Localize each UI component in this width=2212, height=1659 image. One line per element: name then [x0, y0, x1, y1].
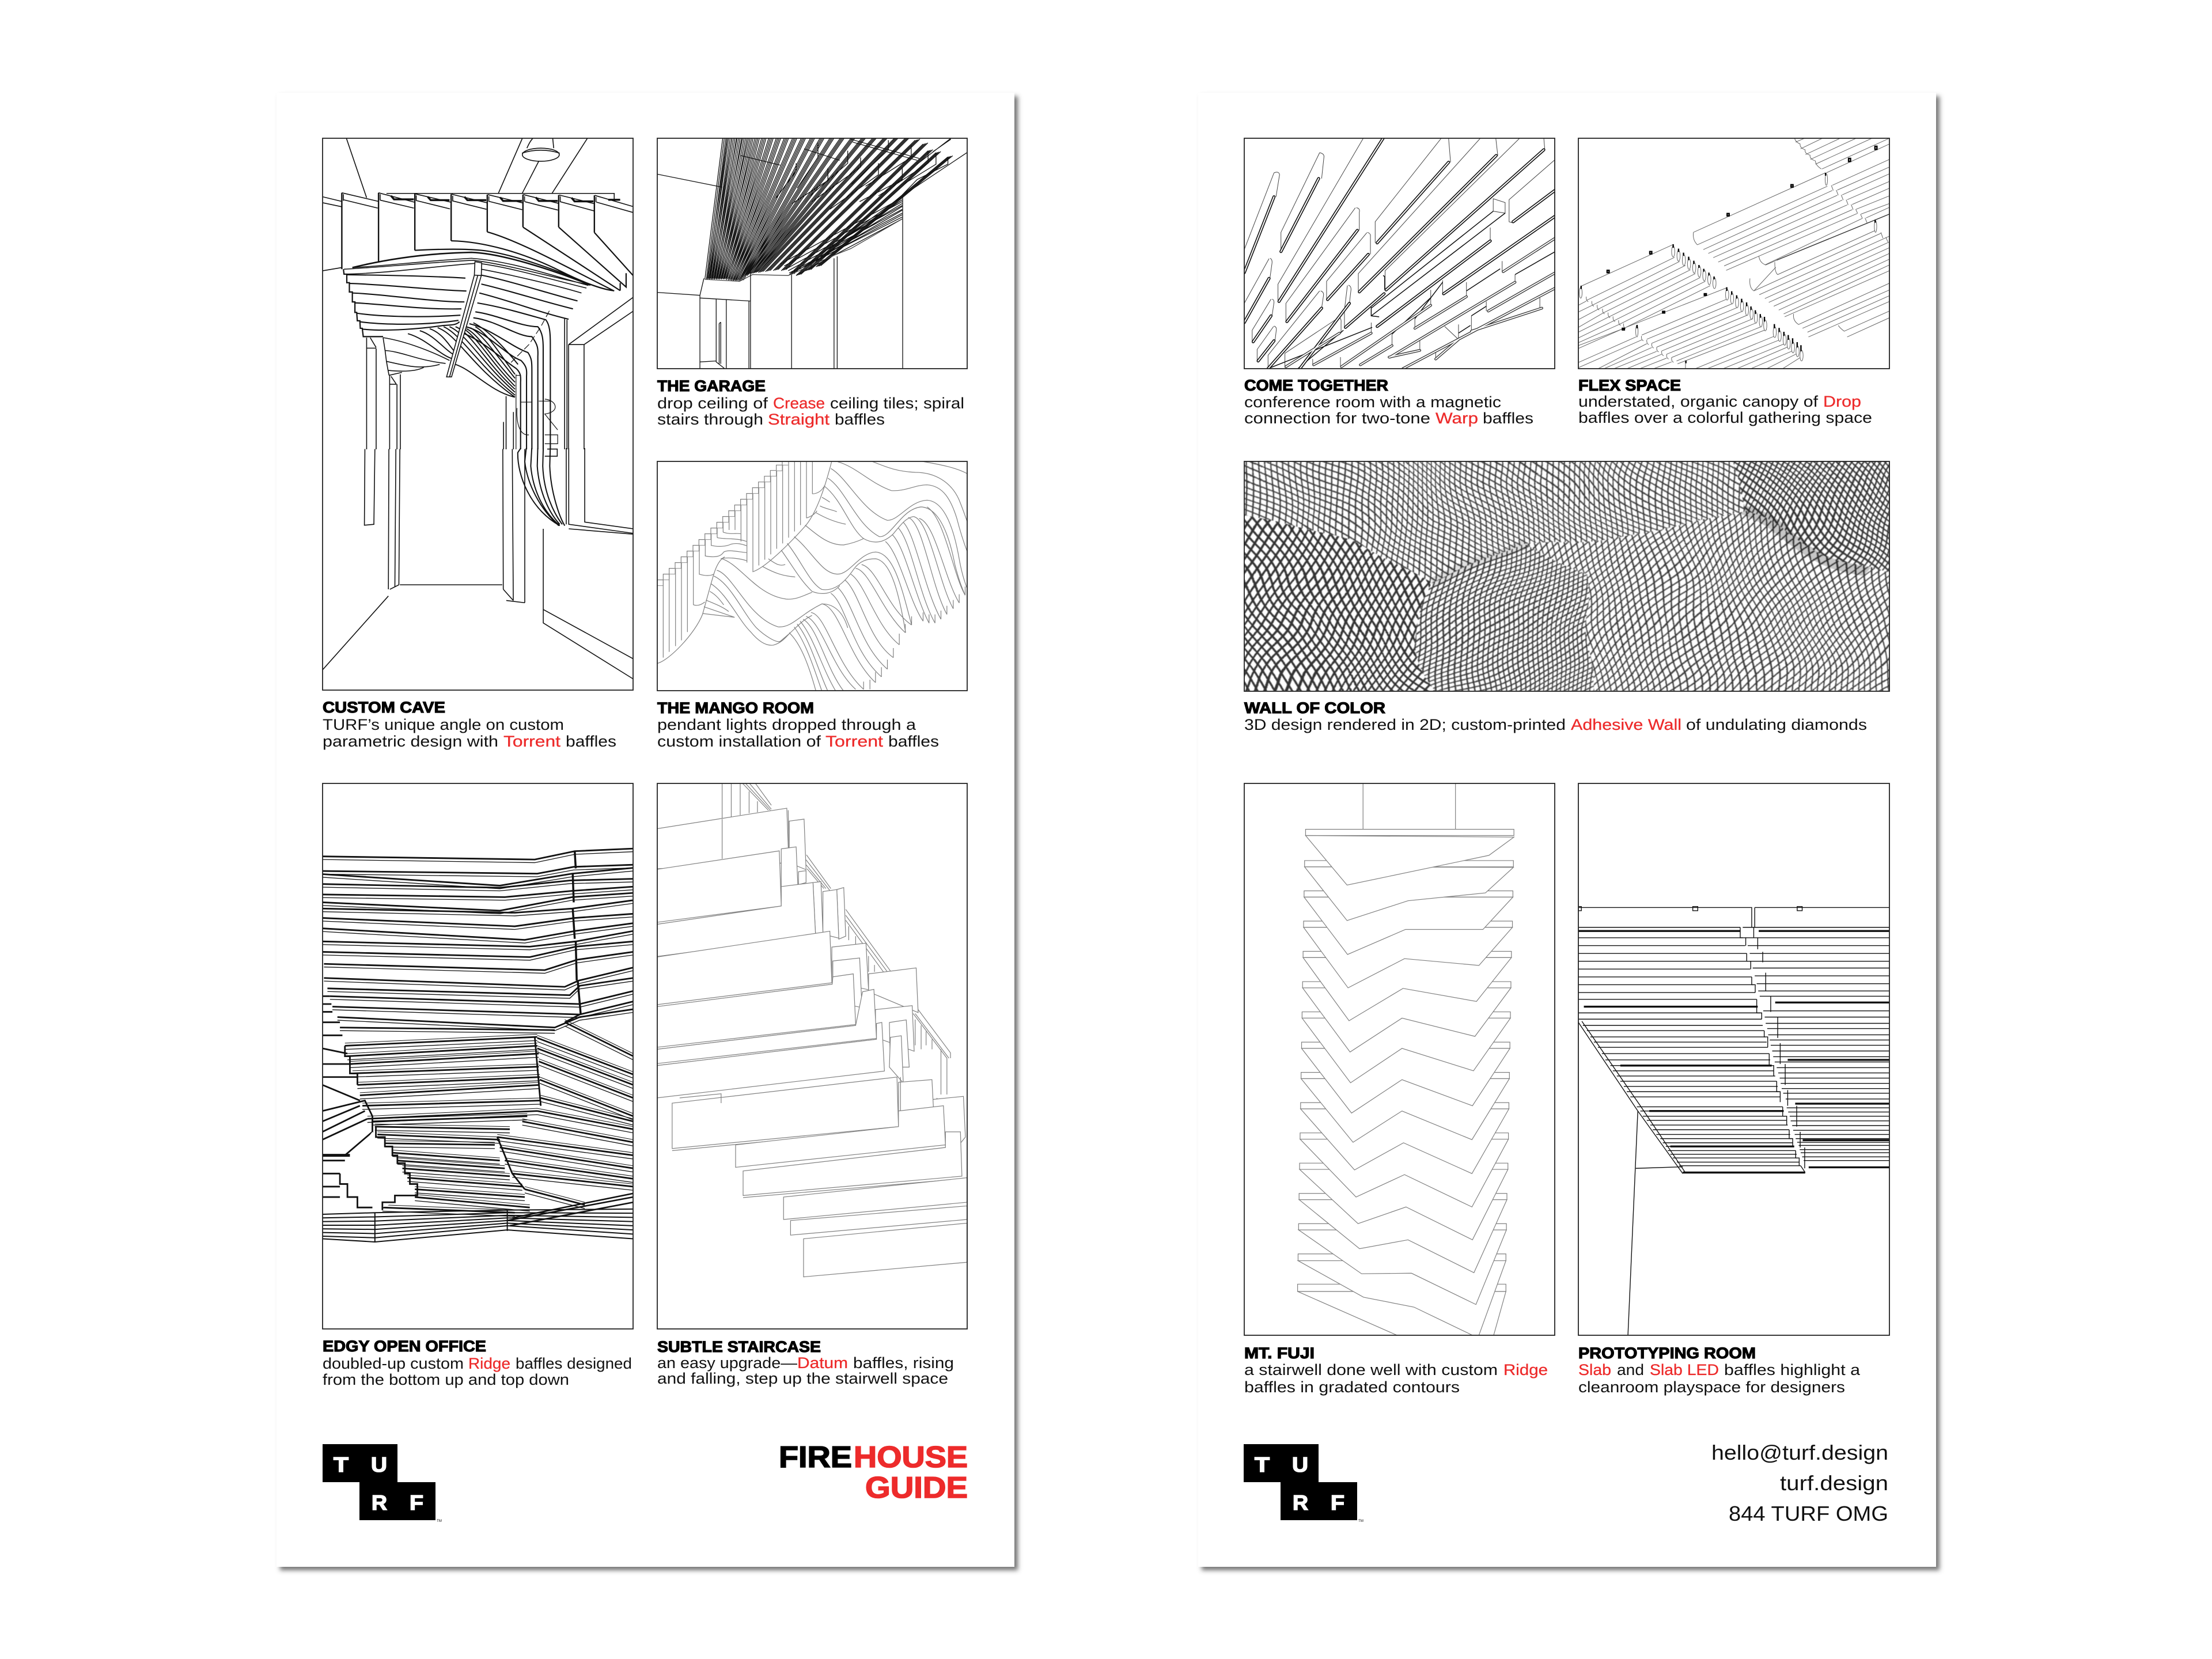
tile frame: wall of color	[1244, 461, 1889, 691]
body text: an easy upgrade—	[657, 1354, 797, 1372]
tile frame: flex space	[1578, 138, 1889, 369]
logo: TURF: T	[334, 1453, 349, 1476]
tile: prototyping room line drawing	[1578, 907, 1889, 1338]
tile: the mango room line drawing	[657, 461, 968, 691]
logo: TURF: R	[1293, 1491, 1308, 1514]
caption: come together	[1244, 377, 1533, 427]
caption: prototyping room	[1578, 1344, 1861, 1396]
body text: baffles	[888, 733, 939, 750]
contact details: 844 TURF OMG	[1729, 1502, 1888, 1525]
body text: Slab	[1578, 1361, 1611, 1378]
body text: stairs through	[657, 411, 763, 428]
tile frame: edgy open office	[323, 783, 633, 1329]
tile: mt. fuji line drawing	[1298, 783, 1514, 1338]
heading: THE MANGO ROOM	[657, 699, 814, 717]
tile: the garage line drawing	[657, 137, 968, 369]
logo: TURF: T	[1255, 1453, 1270, 1476]
body text: of undulating diamonds	[1686, 716, 1867, 733]
body text: conference room with a magnetic	[1244, 393, 1501, 411]
body text	[657, 716, 939, 750]
tile frame: mt. fuji	[1244, 783, 1555, 1335]
title: firehouse guide: FIRE	[779, 1441, 852, 1474]
body text: Warp	[1435, 410, 1478, 427]
logo: TURF: F	[1331, 1491, 1344, 1514]
title: firehouse guide: HOUSE	[854, 1441, 968, 1474]
caption: edgy open office	[323, 1338, 632, 1388]
panel: back page	[1198, 93, 1936, 1567]
body text	[1578, 1361, 1861, 1396]
caption: flex space	[1578, 377, 1872, 426]
body text: doubled-up custom	[323, 1355, 464, 1372]
title: firehouse guide: GUIDE	[865, 1471, 968, 1505]
body text: baffles	[835, 411, 885, 428]
body text	[657, 395, 964, 428]
body text: connection for two-tone	[1244, 410, 1430, 427]
tile: wall of color diamond pattern	[1215, 433, 1918, 720]
body text: and	[1617, 1361, 1644, 1378]
body text: 3D design rendered in 2D; custom-printed	[1244, 716, 1566, 733]
body text: cleanroom playspace for designers	[1578, 1378, 1845, 1396]
heading: MT. FUJI	[1244, 1344, 1315, 1362]
body text: baffles in gradated contours	[1244, 1378, 1460, 1396]
body text	[323, 1355, 632, 1388]
body text: baffles	[566, 733, 616, 750]
body text: a stairwell done well with custom	[1244, 1361, 1498, 1378]
body text: Adhesive Wall	[1571, 716, 1681, 733]
body text: baffles designed	[516, 1355, 632, 1372]
logo: TURF: F	[410, 1491, 423, 1514]
contact details: hello@turf.design	[1711, 1441, 1888, 1464]
body text	[1578, 393, 1872, 426]
title: firehouse guide	[779, 1441, 968, 1505]
body text	[1244, 716, 1867, 733]
body text: baffles over a colorful gathering space	[1578, 409, 1872, 426]
body text: parametric design with	[323, 733, 498, 750]
body text: Torrent	[503, 733, 561, 750]
caption: the garage	[657, 377, 964, 428]
tile: subtle staircase line drawing	[657, 783, 967, 1277]
body text: Straight	[768, 411, 830, 428]
body text: Drop	[1823, 393, 1861, 410]
body text: pendant lights dropped through a	[657, 716, 916, 733]
body text: Slab LED	[1650, 1361, 1719, 1378]
logo: TURF: TM	[437, 1520, 442, 1523]
body text: ceiling tiles; spiral	[830, 395, 964, 412]
body text	[657, 1354, 954, 1387]
heading: COME TOGETHER	[1244, 377, 1388, 394]
tile frame: the garage	[657, 138, 967, 369]
body text: custom installation of	[657, 733, 821, 750]
body text: baffles, rising	[853, 1354, 954, 1372]
body text: drop ceiling of	[657, 395, 768, 412]
tile: custom cave line drawing	[323, 138, 634, 679]
tile: come together line drawing	[1244, 138, 1555, 369]
tile frame: custom cave	[323, 138, 633, 690]
caption: subtle staircase	[657, 1338, 954, 1387]
body text: and falling, step up the stairwell space	[657, 1370, 948, 1387]
logo: TURF: TM	[1358, 1520, 1363, 1523]
caption: custom cave	[323, 699, 616, 750]
caption: mt. fuji	[1244, 1344, 1548, 1396]
tile frame: prototyping room	[1578, 783, 1889, 1335]
body text	[1244, 1361, 1548, 1396]
tile: flex space line drawing	[1578, 138, 1889, 369]
heading: FLEX SPACE	[1578, 377, 1681, 394]
body text: from the bottom up and top down	[323, 1371, 569, 1388]
body text	[323, 716, 616, 750]
page sheet	[1198, 93, 1936, 1567]
tile frame: come together	[1244, 138, 1555, 369]
logo: TURF	[1244, 1444, 1363, 1523]
logo: TURF: U	[371, 1453, 387, 1476]
body text: TURF’s unique angle on custom	[323, 716, 564, 733]
tile: edgy open office line drawing	[323, 849, 633, 1242]
body text: baffles	[1483, 410, 1533, 427]
body text: Ridge	[1503, 1361, 1548, 1378]
panel: firehouse guide front page	[276, 93, 1014, 1567]
body text: baffles highlight a	[1724, 1361, 1861, 1378]
heading: WALL OF COLOR	[1244, 699, 1385, 717]
logo: TURF: U	[1292, 1453, 1308, 1476]
tile frame: the mango room	[657, 461, 967, 691]
body text: Datum	[797, 1354, 848, 1372]
caption: the mango room	[657, 699, 939, 750]
heading: EDGY OPEN OFFICE	[323, 1338, 486, 1355]
contact details	[1711, 1441, 1888, 1525]
heading: THE GARAGE	[657, 377, 766, 395]
heading: SUBTLE STAIRCASE	[657, 1338, 821, 1355]
body text	[1244, 393, 1533, 427]
heading: CUSTOM CAVE	[323, 699, 445, 716]
page sheet	[276, 93, 1014, 1567]
logo: TURF	[323, 1444, 442, 1523]
heading: PROTOTYPING ROOM	[1578, 1344, 1756, 1362]
caption: wall of color	[1244, 699, 1867, 733]
tile frame: subtle staircase	[657, 783, 967, 1329]
body text: Crease	[773, 395, 825, 412]
contact details: turf.design	[1780, 1471, 1888, 1495]
logo: TURF: R	[372, 1491, 387, 1514]
body text: Torrent	[825, 733, 884, 750]
body text: Ridge	[468, 1355, 510, 1372]
body text: understated, organic canopy of	[1578, 393, 1819, 410]
